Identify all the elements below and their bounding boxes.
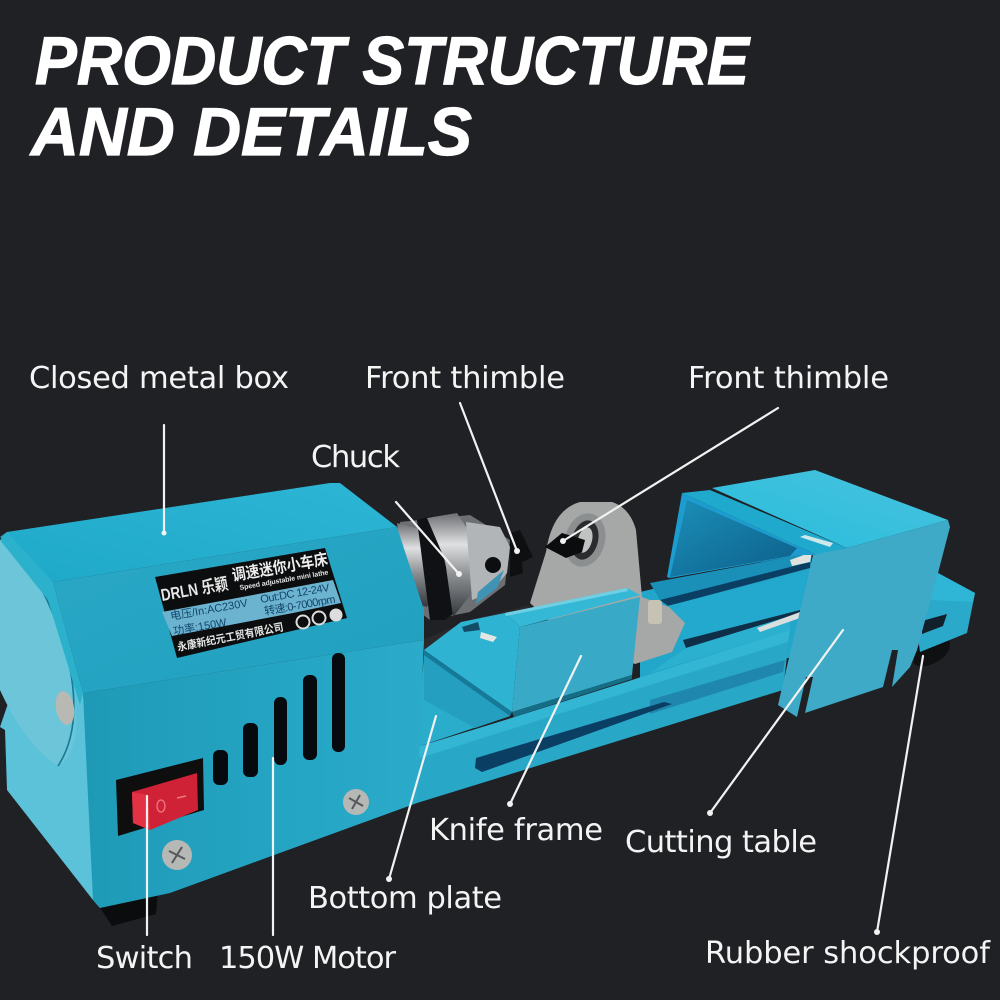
upper front face	[53, 527, 424, 693]
rubber foot right	[914, 638, 950, 666]
nameplate: Out:DC 12-24V	[259, 582, 331, 606]
nameplate	[155, 548, 347, 658]
title: PRODUCT STRUCTURE	[35, 23, 751, 99]
label: cutting table: Cutting table	[625, 825, 817, 860]
label: 150W motor: 150W Motor	[219, 941, 396, 976]
tailstock	[530, 502, 685, 664]
label: front thimble right: Front thimble	[688, 361, 889, 396]
chuck	[397, 513, 533, 620]
title: AND DETAILS	[29, 94, 472, 170]
base rail	[417, 552, 975, 803]
label: knife frame	[429, 656, 603, 848]
title	[29, 23, 751, 170]
nameplate: 转速:0-7000rpm	[263, 592, 336, 618]
nameplate: Speed adjustable mini lathe	[239, 569, 329, 592]
label: front thimble right	[560, 361, 889, 544]
switch	[116, 758, 204, 836]
side bolt	[53, 690, 77, 726]
rail channel	[650, 553, 810, 600]
side cover disc	[0, 540, 76, 766]
label: knife frame: Knife frame	[429, 813, 603, 848]
vent slots	[213, 653, 345, 785]
nameplate: 功率:150W	[172, 615, 228, 638]
cutting table	[667, 470, 950, 717]
label: bottom plate: Bottom plate	[308, 881, 502, 916]
label: chuck: Chuck	[311, 440, 400, 475]
bottom plate	[417, 655, 510, 747]
lathe illustration	[0, 470, 975, 926]
label: switch: Switch	[96, 941, 193, 976]
label: front thimble left: Front thimble	[365, 361, 565, 396]
lower front face	[83, 640, 424, 908]
label: closed metal box: Closed metal box	[29, 361, 289, 396]
label: chuck	[311, 440, 462, 577]
label: cutting table	[625, 630, 843, 860]
nameplate: DRLN 乐颖	[159, 574, 230, 605]
label: rubber shockproof	[705, 656, 991, 971]
label: closed metal box	[29, 361, 289, 536]
left body below side cover	[0, 580, 100, 908]
label: front thimble left	[365, 361, 565, 554]
nameplate: 永康新纪元工贸有限公司	[176, 620, 285, 654]
label: bottom plate	[308, 716, 502, 916]
rubber foot left	[95, 888, 158, 926]
plate behind knife frame	[423, 605, 530, 650]
nameplate: 电压/In:AC230V	[169, 596, 249, 623]
top face	[0, 483, 397, 582]
screws	[343, 789, 369, 815]
motor box	[0, 483, 424, 908]
nameplate: 调速迷你小车床	[230, 549, 329, 585]
label: rubber shockproof: Rubber shockproof	[705, 936, 991, 971]
knife frame	[424, 588, 640, 717]
